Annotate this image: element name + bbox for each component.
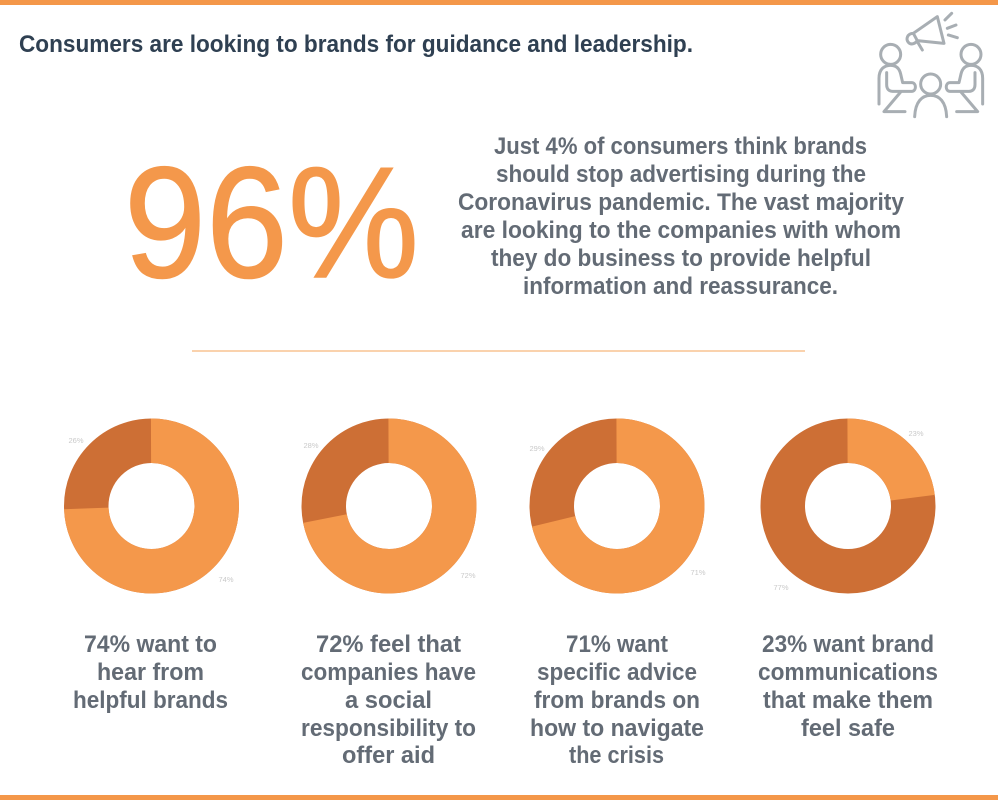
- caption: [758, 631, 938, 742]
- top accent bar: [0, 0, 998, 5]
- donut chart: 72 / 28: 28%: [303, 441, 319, 450]
- panel: 74% helpful brands: [68, 436, 234, 714]
- caption: helpful brands: [73, 687, 228, 714]
- donut chart: 74 / 26: [68, 436, 234, 584]
- caption: hear from: [97, 659, 204, 686]
- caption: the crisis: [569, 742, 664, 769]
- caption: that make them: [763, 687, 933, 714]
- donut chart: 71 / 29: 29%: [529, 444, 545, 453]
- paragraph: just 4% of consumers: they do business to provide helpful: [491, 245, 871, 272]
- paragraph: just 4% of consumers: are looking to the companies with whom: [461, 217, 901, 244]
- caption: responsibility to: [301, 715, 476, 742]
- caption: communications: [758, 659, 938, 686]
- paragraph: just 4% of consumers: [458, 133, 905, 300]
- caption: [73, 631, 228, 714]
- title: Consumers are looking to brands for guidance and leadership.: [19, 31, 693, 58]
- caption: offer aid: [342, 742, 435, 769]
- donut chart: 23 / 77: 77%: [773, 583, 789, 592]
- paragraph: just 4% of consumers: should stop advertising during the: [496, 161, 866, 188]
- bottom accent bar: [0, 795, 998, 800]
- caption: feel safe: [801, 715, 895, 742]
- caption: companies have: [301, 659, 476, 686]
- donut chart: 23 / 77: 23%: [908, 429, 924, 438]
- donut chart: 74 / 26: 26%: [68, 436, 84, 445]
- paragraph: just 4% of consumers: Just 4% of consumers think brands: [494, 133, 867, 160]
- donut chart: 71 / 29: [529, 441, 706, 577]
- panel: 71% specific advice: [529, 441, 706, 769]
- caption: specific advice: [537, 659, 697, 686]
- caption: 23% want brand: [762, 631, 934, 658]
- donut chart: 71 / 29: 71%: [690, 568, 706, 577]
- caption: 71% want: [566, 631, 668, 658]
- donut chart: 23 / 77: [773, 429, 924, 592]
- paragraph: just 4% of consumers: information and reassurance.: [523, 273, 838, 300]
- big statistic: 96%: 96%: [124, 135, 419, 311]
- paragraph: just 4% of consumers: Coronavirus pandemic. The vast majority: [458, 189, 905, 216]
- caption: [301, 631, 476, 769]
- caption: a social: [345, 687, 432, 714]
- donut chart: 72 / 28: 72%: [460, 571, 476, 580]
- icon: people meeting with megaphone: [879, 13, 983, 117]
- caption: how to navigate: [530, 715, 704, 742]
- donut chart: 72 / 28: [303, 441, 476, 580]
- caption: 72% feel that: [316, 631, 461, 658]
- panel: 72% social responsibility: [301, 441, 476, 769]
- caption: from brands on: [534, 687, 700, 714]
- panel: 23% feel safe: [758, 429, 938, 742]
- caption: 74% want to: [84, 631, 217, 658]
- donut chart: 74 / 26: 74%: [218, 575, 234, 584]
- caption: [530, 631, 704, 769]
